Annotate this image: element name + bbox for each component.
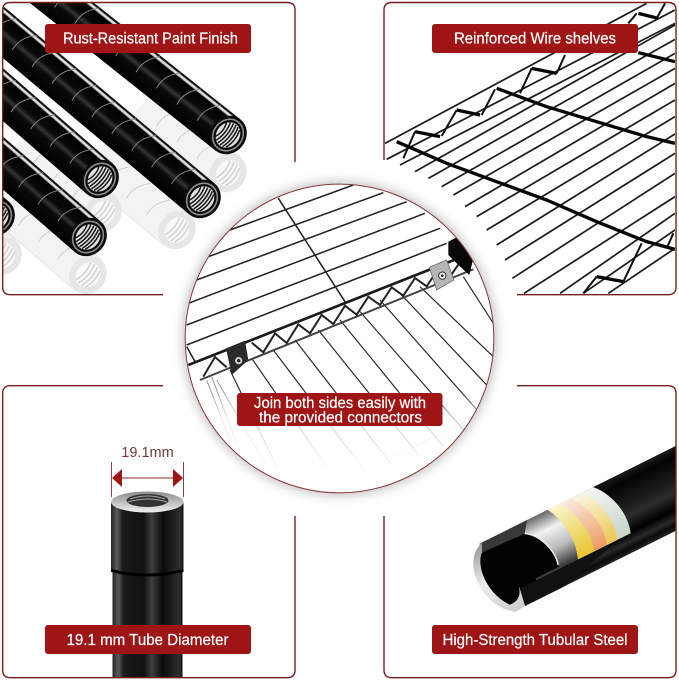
label xyxy=(432,625,638,654)
panel border xyxy=(3,386,295,678)
panel: 19.1 mm tube diameter xyxy=(3,386,295,678)
white halo xyxy=(174,172,506,504)
label: Rust-Resistant Paint Finish xyxy=(63,30,238,48)
panel border xyxy=(384,386,676,678)
panel: rust-resistant paint finish xyxy=(0,0,295,302)
panel: center connector circle xyxy=(174,172,506,504)
label xyxy=(45,24,251,53)
label xyxy=(45,625,251,654)
connector right xyxy=(429,260,454,290)
illustration: vertical tube with collar xyxy=(111,492,184,677)
illustration: shelf joined with connectors xyxy=(180,180,500,500)
panel border xyxy=(384,2,676,295)
illustration: tube cutaway with layers xyxy=(473,446,676,612)
label: 19.1 mm Tube Diameter xyxy=(66,632,228,649)
panel border xyxy=(3,2,295,295)
dimension: 19.1mm arrow xyxy=(112,445,184,497)
panel: high-strength tubular steel xyxy=(384,386,679,678)
connector left xyxy=(226,341,248,375)
label: Reinforced Wire shelves xyxy=(454,30,616,48)
label: Join both sides easily with xyxy=(254,395,426,412)
label: the provided connectors xyxy=(259,410,422,426)
panel: reinforced wire shelves xyxy=(384,2,676,295)
soft shadow xyxy=(184,182,496,494)
label: High-Strength Tubular Steel xyxy=(442,632,628,649)
label xyxy=(432,24,638,53)
illustration: wire shelf close-up xyxy=(385,3,675,293)
illustration: black shelf posts with reflections xyxy=(0,0,255,302)
label xyxy=(237,393,442,426)
dimension: 19.1mm arrow: 19.1mm xyxy=(121,445,174,461)
